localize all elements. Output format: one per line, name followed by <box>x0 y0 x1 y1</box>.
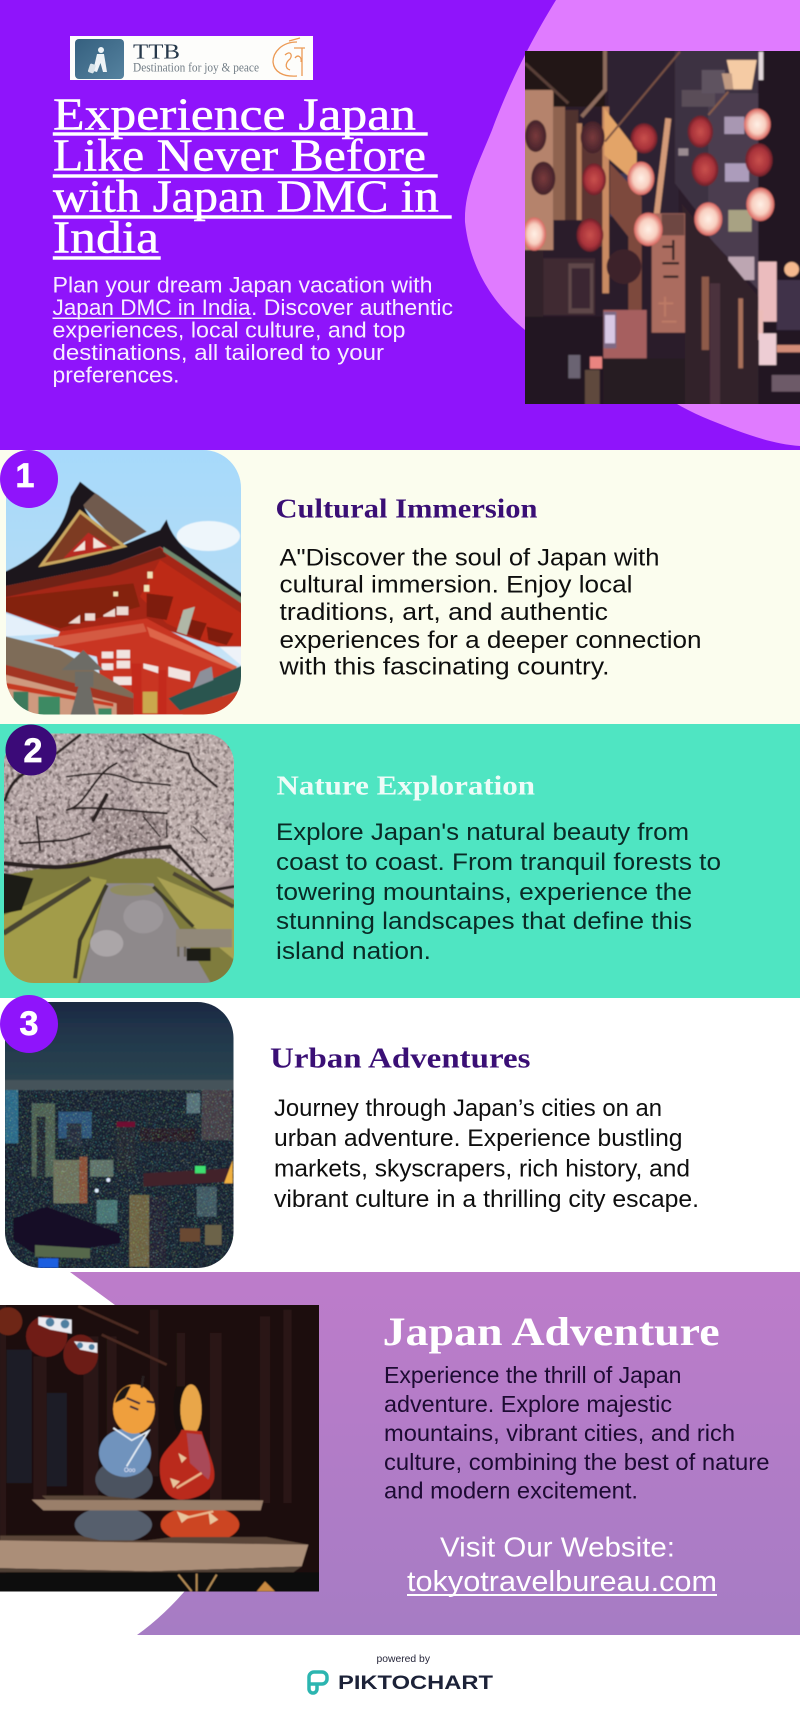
subtitle <box>52 273 453 388</box>
call to action: visit website <box>407 1532 717 1598</box>
subtitle: Japan DMC in India <box>52 295 251 320</box>
logo: TTB <box>70 36 313 80</box>
body text <box>274 1095 699 1213</box>
photo: painted gourd dolls <box>0 1296 329 1600</box>
icon: Piktochart logo <box>309 1672 327 1693</box>
panel: step 2 Nature Exploration <box>0 723 800 998</box>
body text: mountains, vibrant cities, and rich <box>384 1420 735 1446</box>
logo tagline: Destination for joy & peace <box>133 60 259 74</box>
body text <box>276 819 721 965</box>
body text: Experience the thrill of Japan <box>384 1362 682 1388</box>
number badge 2: 2 <box>24 732 42 770</box>
number badge 2 <box>6 724 56 776</box>
number badge 3: 3 <box>20 1005 38 1043</box>
panel: Japan Adventure <box>0 1272 800 1635</box>
heading: Cultural Immersion: Cultural Immersion <box>276 494 538 524</box>
body text: A"Discover the soul of Japan with <box>280 544 660 572</box>
body text: cultural immersion. Enjoy local <box>280 572 632 599</box>
icon: orange emblem <box>273 38 305 76</box>
title: Like Never Before <box>53 130 426 181</box>
heading: Urban Adventures: Urban Adventures <box>270 1043 530 1075</box>
body text: coast to coast. From tranquil forests to <box>276 849 721 876</box>
photo: cherry blossom canal <box>4 734 234 983</box>
body text: with this fascinating country. <box>278 654 610 680</box>
call to action: visit website: tokyotravelbureau.com <box>407 1566 717 1598</box>
number badge 3 <box>0 995 58 1053</box>
photo: city at night <box>5 1002 234 1268</box>
pink blob behind header photo <box>465 0 800 446</box>
right doll <box>160 1384 239 1543</box>
body text: traditions, art, and authentic <box>280 599 608 626</box>
left doll: Ooo <box>124 1468 136 1474</box>
hanging lanterns <box>523 109 774 252</box>
call to action: visit website: Visit Our Website: <box>440 1532 675 1563</box>
body text: vibrant culture in a thrilling city escape. <box>274 1186 699 1213</box>
body text: urban adventure. Experience bustling <box>274 1125 682 1152</box>
photo: lantern alley <box>525 51 800 404</box>
subtitle: experiences, local culture, and top <box>52 318 406 343</box>
subtitle: . Discover authentic <box>251 295 453 320</box>
body text: adventure. Explore majestic <box>384 1391 672 1417</box>
body text: culture, combining the best of nature <box>384 1449 770 1475</box>
powered by label: powered by <box>376 1653 431 1665</box>
left doll <box>75 1376 155 1543</box>
icon: traveller <box>75 39 124 79</box>
panel: step 1 Cultural Immersion <box>0 443 800 724</box>
body text: island nation. <box>276 938 431 965</box>
body text: stunning landscapes that define this <box>276 908 692 935</box>
street lamp <box>727 60 757 89</box>
body text: markets, skyscrapers, rich history, and <box>274 1156 690 1183</box>
title <box>53 88 452 263</box>
body text: towering mountains, experience the <box>276 879 692 906</box>
body text: experiences for a deeper connection <box>280 627 702 654</box>
heading: Japan Adventure: Japan Adventure <box>383 1309 720 1354</box>
panel: header background <box>0 0 800 450</box>
title: with Japan DMC in <box>53 171 439 222</box>
subtitle: destinations, all tailored to your <box>52 340 385 365</box>
footer: powered by Piktochart <box>309 1653 493 1694</box>
title: India <box>53 212 159 263</box>
panel: step 3 Urban Adventures <box>0 995 697 1268</box>
photo: red temple <box>6 450 241 714</box>
body text: and modern excitement. <box>384 1478 638 1504</box>
body text <box>384 1362 770 1504</box>
subtitle: preferences. <box>52 363 180 388</box>
body text: Journey through Japan’s cities on an <box>274 1095 662 1122</box>
Piktochart wordmark: PIKTOCHART <box>338 1673 493 1694</box>
subtitle: Plan your dream Japan vacation with <box>52 273 433 298</box>
heading: Nature Exploration: Nature Exploration <box>276 770 535 800</box>
number badge 1 <box>0 450 58 508</box>
body text <box>278 544 702 680</box>
number badge 1: 1 <box>16 457 34 495</box>
logo wordmark: TTB <box>133 40 180 64</box>
title: Experience Japan <box>53 88 416 139</box>
body text: Explore Japan's natural beauty from <box>276 819 689 846</box>
